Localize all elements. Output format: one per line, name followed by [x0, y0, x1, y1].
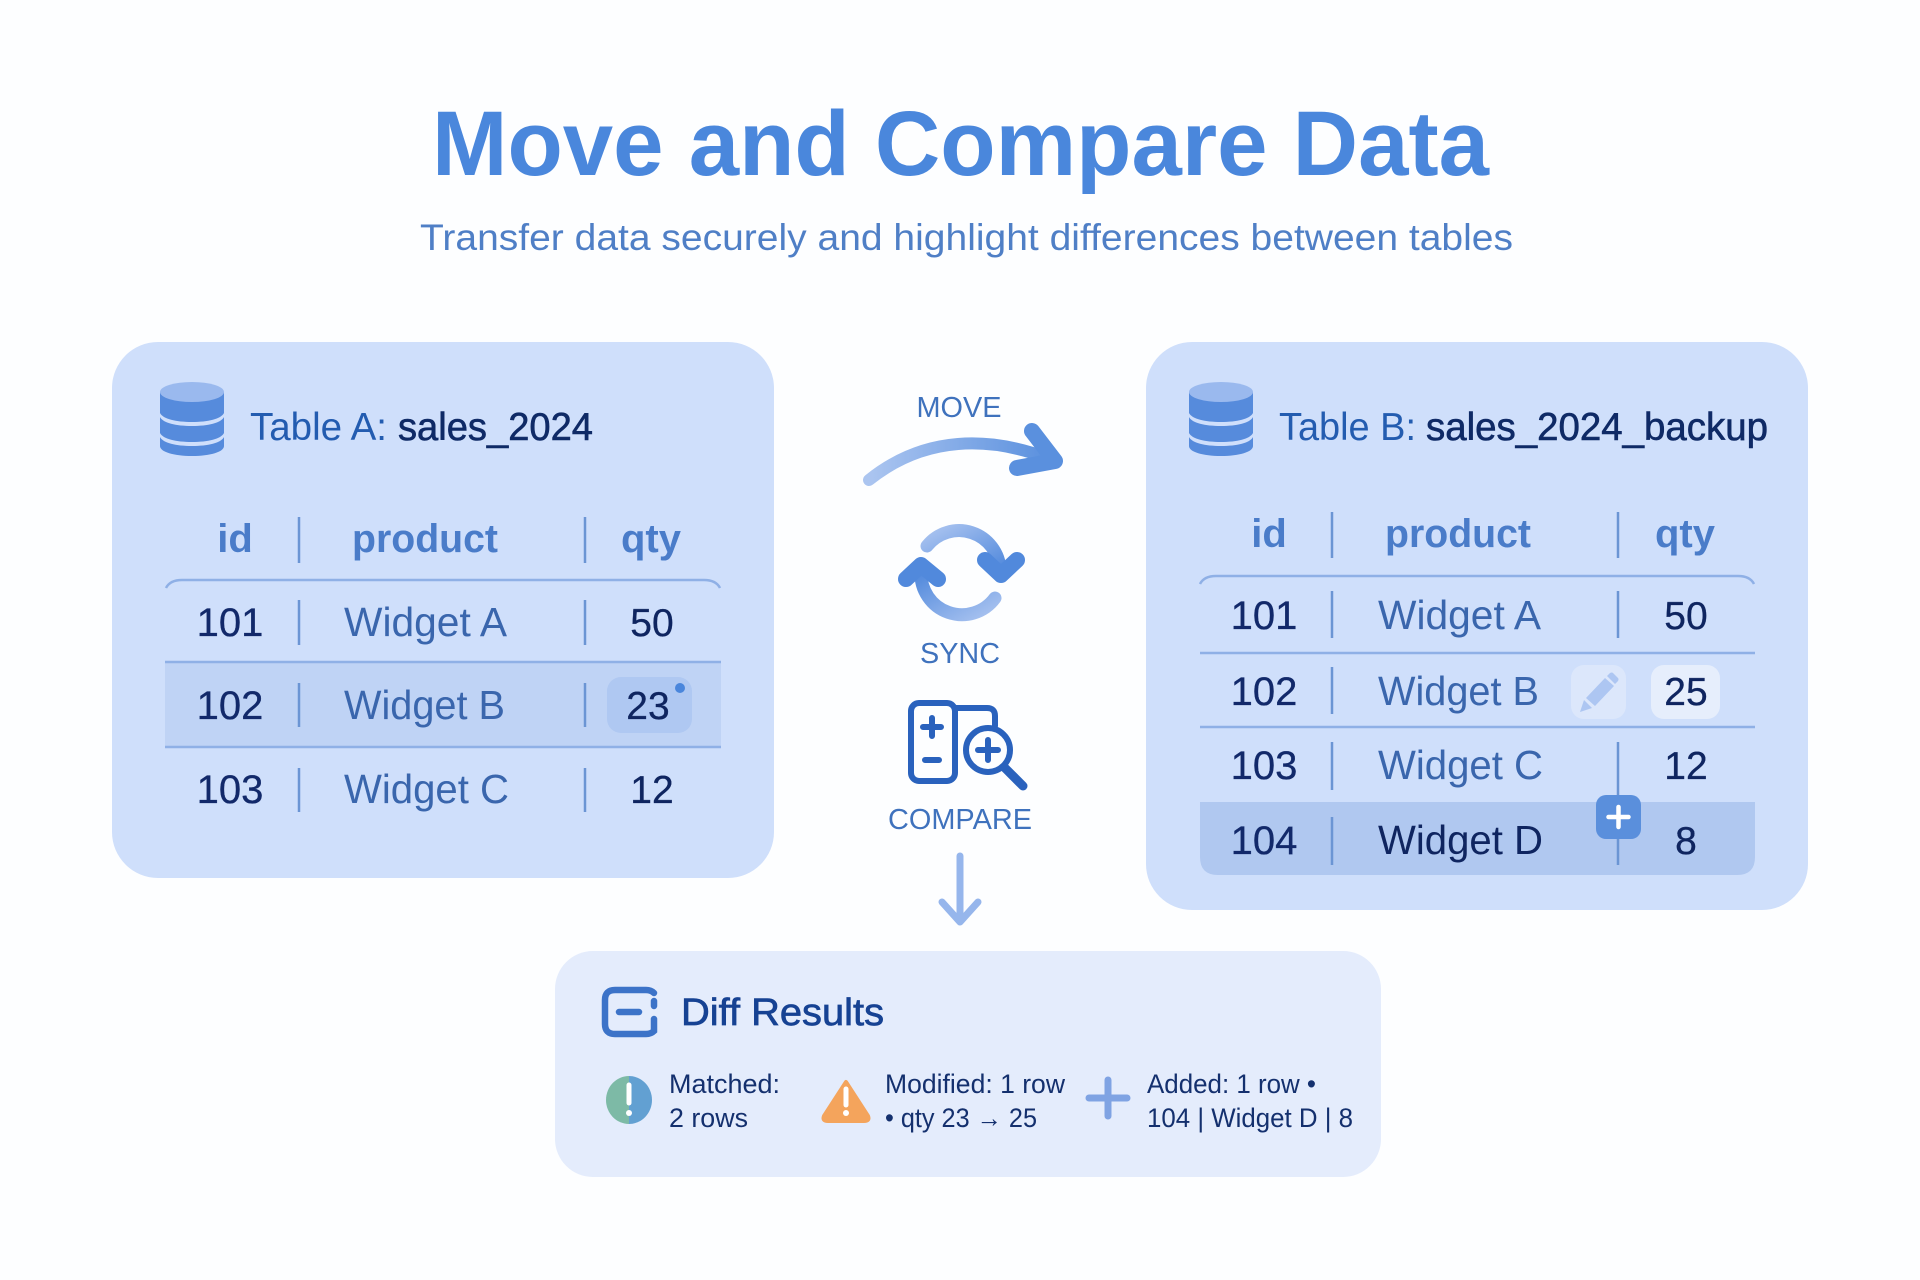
table B row 101: [1231, 591, 1708, 638]
changed value 23: [607, 677, 692, 733]
table A row 103: Widget C: [344, 766, 509, 812]
heading: table A name: Table A:: [250, 406, 387, 449]
table A header: [217, 517, 682, 563]
item: added: [1089, 1069, 1353, 1133]
table B row 103: 103: [1231, 744, 1297, 788]
heading: diff results: Diff Results: [681, 992, 884, 1034]
panel: table A: [112, 342, 774, 878]
heading: table B name: Table B:: [1279, 406, 1416, 449]
table A row 102 highlighted: 102: [197, 684, 263, 728]
table B row 103: [1231, 742, 1708, 800]
arrow: move: [869, 431, 1055, 480]
label: sync: SYNC: [920, 638, 1000, 670]
heading: table A name: [250, 406, 593, 449]
table B row 104 added: 104: [1231, 819, 1297, 863]
arrow: down: [942, 856, 978, 922]
table B row 104 added: [1200, 795, 1755, 875]
table A header: qty: [621, 517, 682, 561]
table B row 104 added: 8: [1675, 820, 1697, 863]
icon: compare: [911, 703, 1023, 786]
heading: table B name: [1279, 406, 1768, 449]
item: modified: Modified: 1 row: [885, 1069, 1065, 1099]
title: Move and Compare Data: [432, 93, 1490, 195]
changed value 23: 23: [626, 685, 670, 728]
table A row 102 highlighted: [165, 662, 721, 747]
table B row 102 modified: [1231, 665, 1720, 719]
icon: plus badge: [1596, 795, 1641, 839]
subtitle: Transfer data securely and highlight differences between tables: [420, 217, 1513, 258]
heading: table B name: sales_2024_backup: [1426, 406, 1768, 449]
icon: database B: [1189, 382, 1253, 456]
icon: diff: [605, 990, 654, 1034]
item: matched: [606, 1069, 780, 1133]
table A row 103: 12: [630, 769, 674, 812]
item: modified: [824, 1069, 1065, 1133]
panel: diff results: [555, 951, 1381, 1177]
table B row 103: 12: [1664, 745, 1708, 788]
item: added: Added: 1 row •: [1147, 1069, 1316, 1099]
table B row 103: Widget C: [1378, 742, 1543, 788]
label: move: MOVE: [916, 392, 1002, 424]
table A row 102 highlighted: Widget B: [344, 682, 505, 728]
item: modified: • qty 23 → 25: [885, 1103, 1037, 1133]
icon: sync arrows: [906, 531, 1017, 615]
table A row 101: Widget A: [344, 599, 508, 645]
label: compare: COMPARE: [888, 804, 1032, 836]
table B row 101: Widget A: [1378, 592, 1542, 638]
heading: table A name: sales_2024: [398, 406, 593, 449]
table A row 101: [197, 599, 674, 645]
table A header: product: [352, 517, 498, 561]
table B row 101: 101: [1231, 594, 1297, 638]
table A row 101: 101: [197, 601, 263, 645]
table B row 104 added: Widget D: [1378, 817, 1543, 863]
new value 25: [1651, 665, 1720, 719]
panel: table B: [1146, 342, 1808, 910]
item: matched: Matched:: [669, 1069, 780, 1099]
table B header: qty: [1655, 512, 1716, 556]
icon: database A: [160, 382, 224, 456]
table B header: product: [1385, 512, 1531, 556]
table B row 102 modified: Widget B: [1378, 668, 1539, 714]
table A row 103: 103: [197, 768, 263, 812]
new value 25: 25: [1664, 671, 1708, 714]
table B header: id: [1251, 512, 1287, 556]
item: added: 104 | Widget D | 8: [1147, 1103, 1353, 1133]
table B row 101: 50: [1664, 595, 1708, 638]
item: matched: 2 rows: [669, 1103, 748, 1133]
icon: pencil chip: [1571, 665, 1626, 719]
table A header: id: [217, 517, 253, 561]
table A row 101: 50: [630, 602, 674, 645]
table B row 102 modified: 102: [1231, 670, 1297, 714]
table A row 103: [197, 766, 674, 812]
table B header: [1251, 512, 1716, 558]
